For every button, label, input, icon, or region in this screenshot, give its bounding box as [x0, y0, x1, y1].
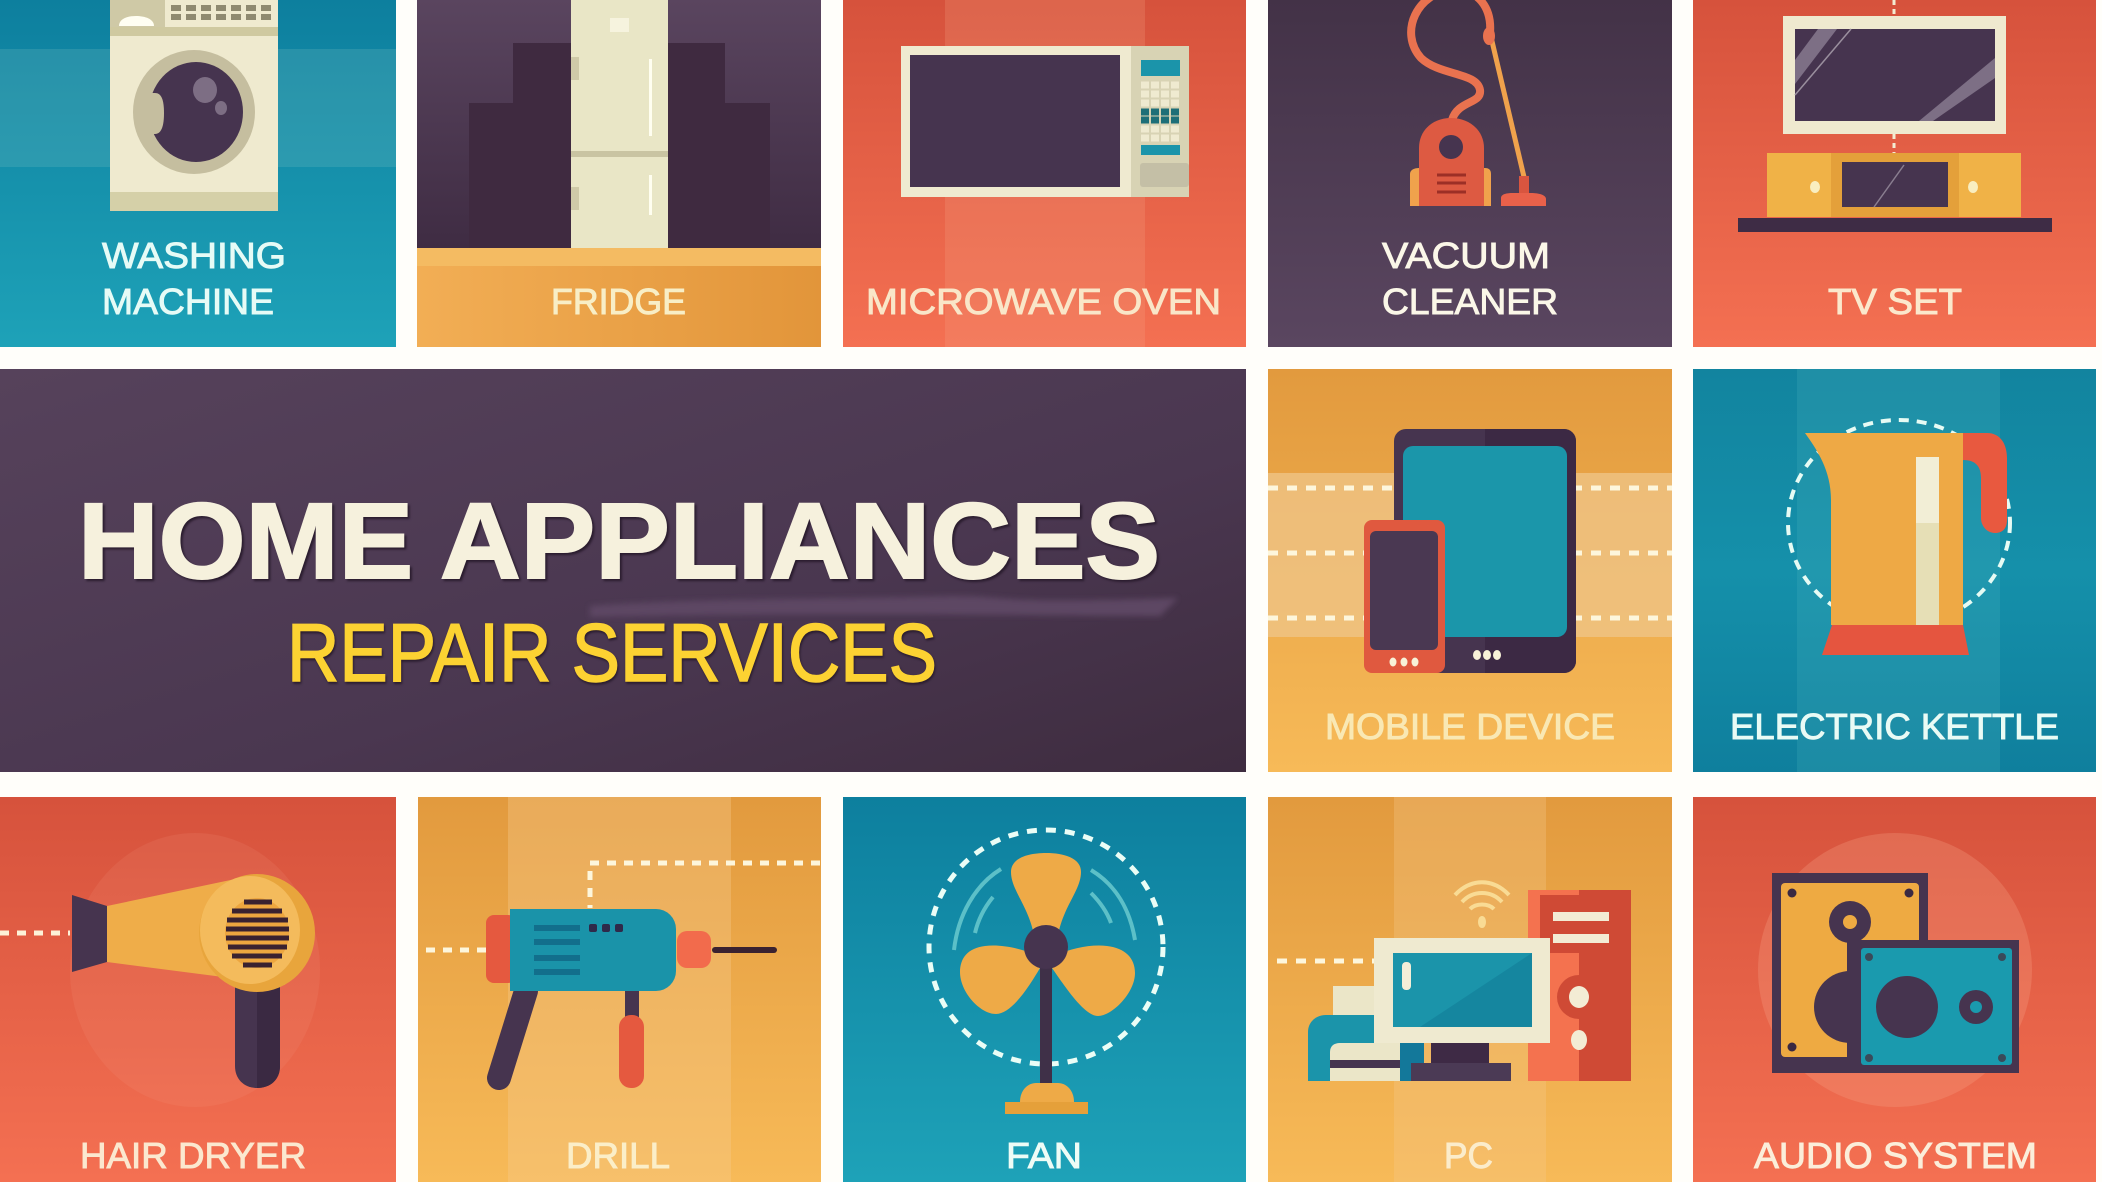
icon: fan: [960, 853, 1135, 1114]
label: electric kettle: ELECTRIC KETTLE: [1730, 706, 2059, 747]
icon: computer tower: [1528, 890, 1631, 1081]
panel: mobile device: [1268, 369, 1672, 772]
icon: printer: [1308, 986, 1424, 1081]
label: audio system: AUDIO SYSTEM: [1754, 1135, 2037, 1176]
label: vacuum cleaner: CLEANER: [1382, 281, 1558, 322]
icon: drill: [486, 909, 777, 1088]
title: HOME APPLIANCES: [78, 480, 1160, 601]
panel: hair dryer: [0, 797, 396, 1182]
label: washing machine: [102, 235, 286, 322]
panel: electric kettle: [1693, 369, 2096, 772]
label: vacuum cleaner: VACUUM: [1382, 235, 1550, 276]
panel: washing machine: [0, 0, 396, 347]
panel: fridge: [417, 0, 821, 347]
icon: vacuum cleaner: [1410, 0, 1546, 206]
panel: drill: [418, 797, 821, 1182]
icon: monitor: [1374, 938, 1550, 1081]
label: mobile device: MOBILE DEVICE: [1325, 706, 1615, 747]
panel: vacuum cleaner: [1268, 0, 1672, 347]
icon: microwave: [901, 46, 1189, 197]
label: hair dryer: HAIR DRYER: [80, 1135, 306, 1176]
label: pc: PC: [1444, 1135, 1493, 1176]
icon: hair dryer: [72, 874, 315, 1088]
icon: fridge: [571, 0, 668, 248]
subtitle: REPAIR SERVICES: [287, 606, 937, 699]
panel: tv set: [1693, 0, 2096, 347]
panel: audio system: [1693, 797, 2096, 1182]
label: washing machine: MACHINE: [102, 281, 274, 322]
panel: pc: [1268, 797, 1672, 1182]
label: washing machine: WASHING: [102, 235, 286, 276]
panel: title banner: [0, 369, 1246, 772]
panel: fan: [843, 797, 1246, 1182]
label: tv set: TV SET: [1828, 281, 1962, 322]
label: fan: FAN: [1006, 1135, 1082, 1176]
icon: washing machine: [110, 0, 278, 211]
label: vacuum cleaner: [1382, 235, 1558, 322]
icon: kettle: [1805, 433, 2007, 655]
icon: wifi: [1455, 882, 1509, 926]
icon: tall speaker: [1772, 873, 1928, 1073]
icon: wide speaker: [1847, 940, 2019, 1073]
icon: tablet and phone: [1364, 429, 1576, 673]
label: drill: DRILL: [566, 1135, 670, 1176]
panel: microwave oven: [843, 0, 1246, 347]
icon: tv set: [1738, 0, 2052, 232]
label: microwave oven: MICROWAVE OVEN: [866, 281, 1221, 322]
label: fridge: FRIDGE: [551, 281, 686, 322]
